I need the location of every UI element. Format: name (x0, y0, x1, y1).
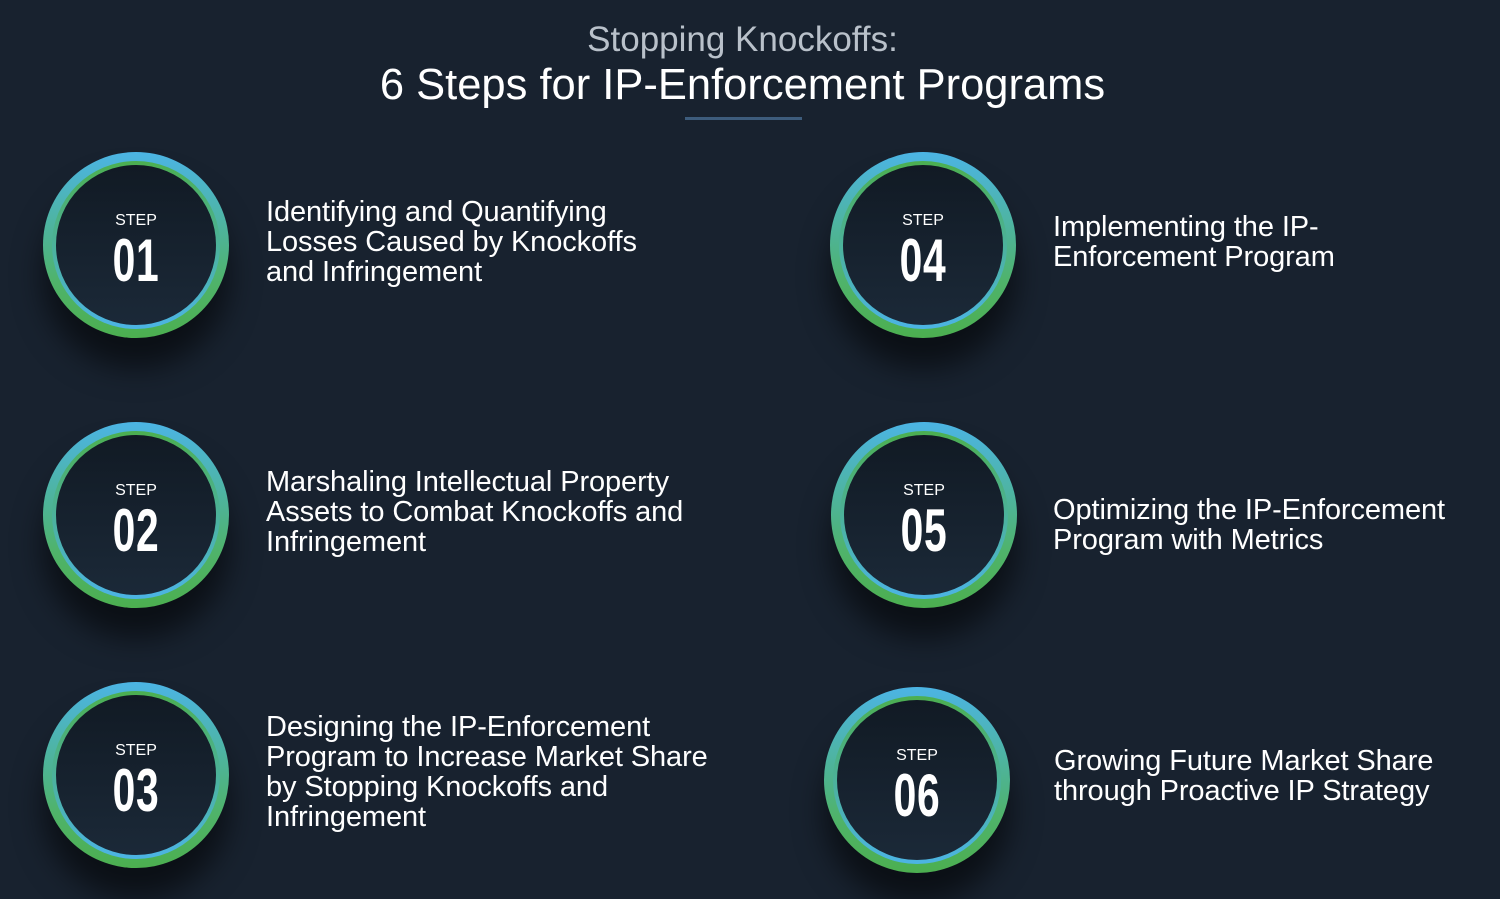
step 05 circle: STEP (903, 482, 945, 499)
step 05 text: Program with Metrics (1053, 524, 1323, 556)
step 04 text: Implementing the IP- (1053, 211, 1319, 243)
step 02 text: Marshaling Intellectual Property (266, 466, 669, 498)
step 01 text: and Infringement (266, 256, 482, 288)
step 04 text: Enforcement Program (1053, 241, 1335, 273)
step 01 text (266, 196, 637, 288)
step 04 circle: 04 (900, 227, 946, 294)
subtitle: 6 Steps for IP-Enforcement Programs (380, 61, 1105, 109)
step 02 circle: STEP (115, 482, 157, 499)
step 01 text: Identifying and Quantifying (266, 196, 607, 228)
title: Stopping Knockoffs: (587, 20, 898, 59)
step 06 circle: 06 (894, 762, 940, 829)
step 02 circle (43, 422, 229, 608)
step 06 text (1054, 745, 1433, 807)
step 04 circle: STEP (902, 212, 944, 229)
step 05 text (1053, 494, 1445, 556)
step 03 text (266, 711, 708, 833)
step 06 text: Growing Future Market Share (1054, 745, 1433, 777)
step 03 text: Infringement (266, 801, 426, 833)
step 03 circle (43, 682, 229, 868)
step 02 text (266, 466, 683, 558)
step 03 text: Program to Increase Market Share (266, 741, 708, 773)
step 05 circle (831, 422, 1017, 608)
step 02 circle: 02 (113, 497, 159, 564)
step 06 circle (824, 687, 1010, 873)
step 06 circle: STEP (896, 747, 938, 764)
step 05 text: Optimizing the IP-Enforcement (1053, 494, 1445, 526)
step 02 text: Infringement (266, 526, 426, 558)
step 02 text: Assets to Combat Knockoffs and (266, 496, 683, 528)
step 01 circle (43, 152, 229, 338)
step 03 circle: 03 (113, 757, 159, 824)
step 01 text: Losses Caused by Knockoffs (266, 226, 637, 258)
step 06 text: through Proactive IP Strategy (1054, 775, 1429, 807)
step 05 circle: 05 (901, 497, 947, 564)
step 03 text: by Stopping Knockoffs and (266, 771, 608, 803)
step 03 text: Designing the IP-Enforcement (266, 711, 650, 743)
step 01 circle: STEP (115, 212, 157, 229)
step 04 text (1053, 211, 1335, 273)
step 04 circle (830, 152, 1016, 338)
step 01 circle: 01 (113, 227, 159, 294)
step 03 circle: STEP (115, 742, 157, 759)
